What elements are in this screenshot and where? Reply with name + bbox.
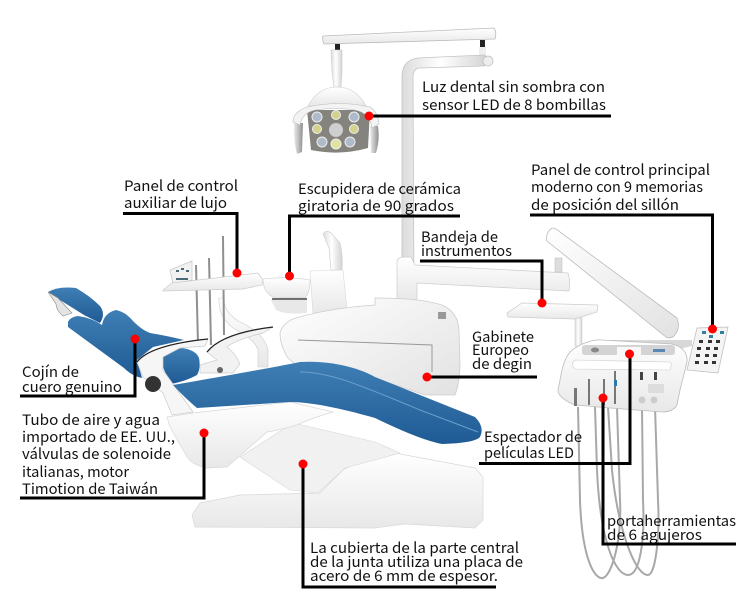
callout: cushion: cuero genuino	[22, 376, 122, 397]
callout: LED film viewer: películas LED	[484, 442, 574, 463]
callout: instrument tray	[420, 226, 546, 308]
callout: air and water tube	[20, 409, 208, 499]
cabinet	[280, 298, 460, 395]
callout: cabinet: de degin	[472, 353, 532, 374]
callout: air and water tube: válvulas de solenoide	[22, 443, 171, 464]
callout: LED film viewer: Espectador de	[484, 426, 582, 447]
armrests and hinge	[137, 327, 273, 415]
callout: dental light	[364, 76, 611, 120]
callout: main control panel: Panel de control principal	[531, 159, 710, 180]
callout: main control panel	[530, 159, 717, 334]
headrest bracket	[48, 292, 72, 316]
seat cushion	[173, 362, 482, 444]
backrest lower pad	[163, 348, 200, 384]
callout: main control panel: moderno con 9 memorias	[531, 176, 703, 197]
headrest	[48, 288, 103, 323]
callout: auxiliary panel: Panel de control	[124, 175, 238, 196]
dental light with arm	[293, 28, 496, 300]
callout: cabinet: Europeo	[472, 339, 529, 360]
callout: ceramic spittoon	[285, 178, 461, 280]
light post and upper arm	[323, 28, 496, 300]
callout: LED film viewer	[479, 350, 634, 464]
callout: air and water tube: Tubo de aire y agua	[22, 409, 160, 430]
callout: air and water tube: italianas, motor	[22, 461, 129, 482]
main control head	[558, 340, 692, 412]
callout: six-hole tool holder: portaherramientas	[607, 510, 736, 531]
callout: central joint cover	[298, 460, 523, 587]
callout: six-hole tool holder	[598, 394, 736, 545]
chair base	[192, 423, 483, 528]
callout: central joint cover: acero de 6 mm de espesor.	[310, 565, 498, 586]
keypad	[687, 327, 728, 373]
callout: dental light: sensor LED de 8 bombillas	[422, 94, 606, 115]
callout: auxiliary panel	[123, 175, 242, 278]
callout: instrument tray: instrumentos	[421, 240, 512, 261]
callout: main control panel: de posición del sillón	[531, 194, 679, 215]
callout: auxiliary panel: auxiliar de lujo	[124, 192, 227, 213]
instrument tray	[507, 303, 598, 346]
auxiliary tray and instruments	[163, 236, 268, 367]
hoses	[578, 407, 658, 578]
spittoon	[263, 231, 347, 314]
callout: six-hole tool holder: de 6 agujeros	[607, 524, 702, 545]
lamp head	[293, 44, 379, 154]
callout: air and water tube: Timotion de Taiwán	[22, 478, 158, 499]
callout: cushion: Cojín de	[22, 361, 79, 382]
callout: cushion	[20, 334, 140, 397]
callout: cabinet	[422, 326, 537, 382]
callout: dental light: Luz dental sin sombra con	[422, 76, 605, 97]
callout: central joint cover: de la junta utiliza una placa de	[310, 551, 523, 572]
callout: ceramic spittoon: giratoria de 90 grados	[298, 195, 454, 216]
callout: instrument tray: Bandeja de	[421, 226, 498, 247]
backrest cushion	[68, 310, 184, 378]
seat support	[167, 402, 333, 468]
callout: central joint cover: La cubierta de la parte central	[310, 537, 519, 558]
callout: air and water tube: importado de EE. UU.,	[22, 426, 175, 447]
callout: ceramic spittoon: Escupidera de cerámica	[298, 178, 461, 199]
instrument arm	[397, 228, 678, 338]
callout: cabinet: Gabinete	[472, 326, 534, 347]
